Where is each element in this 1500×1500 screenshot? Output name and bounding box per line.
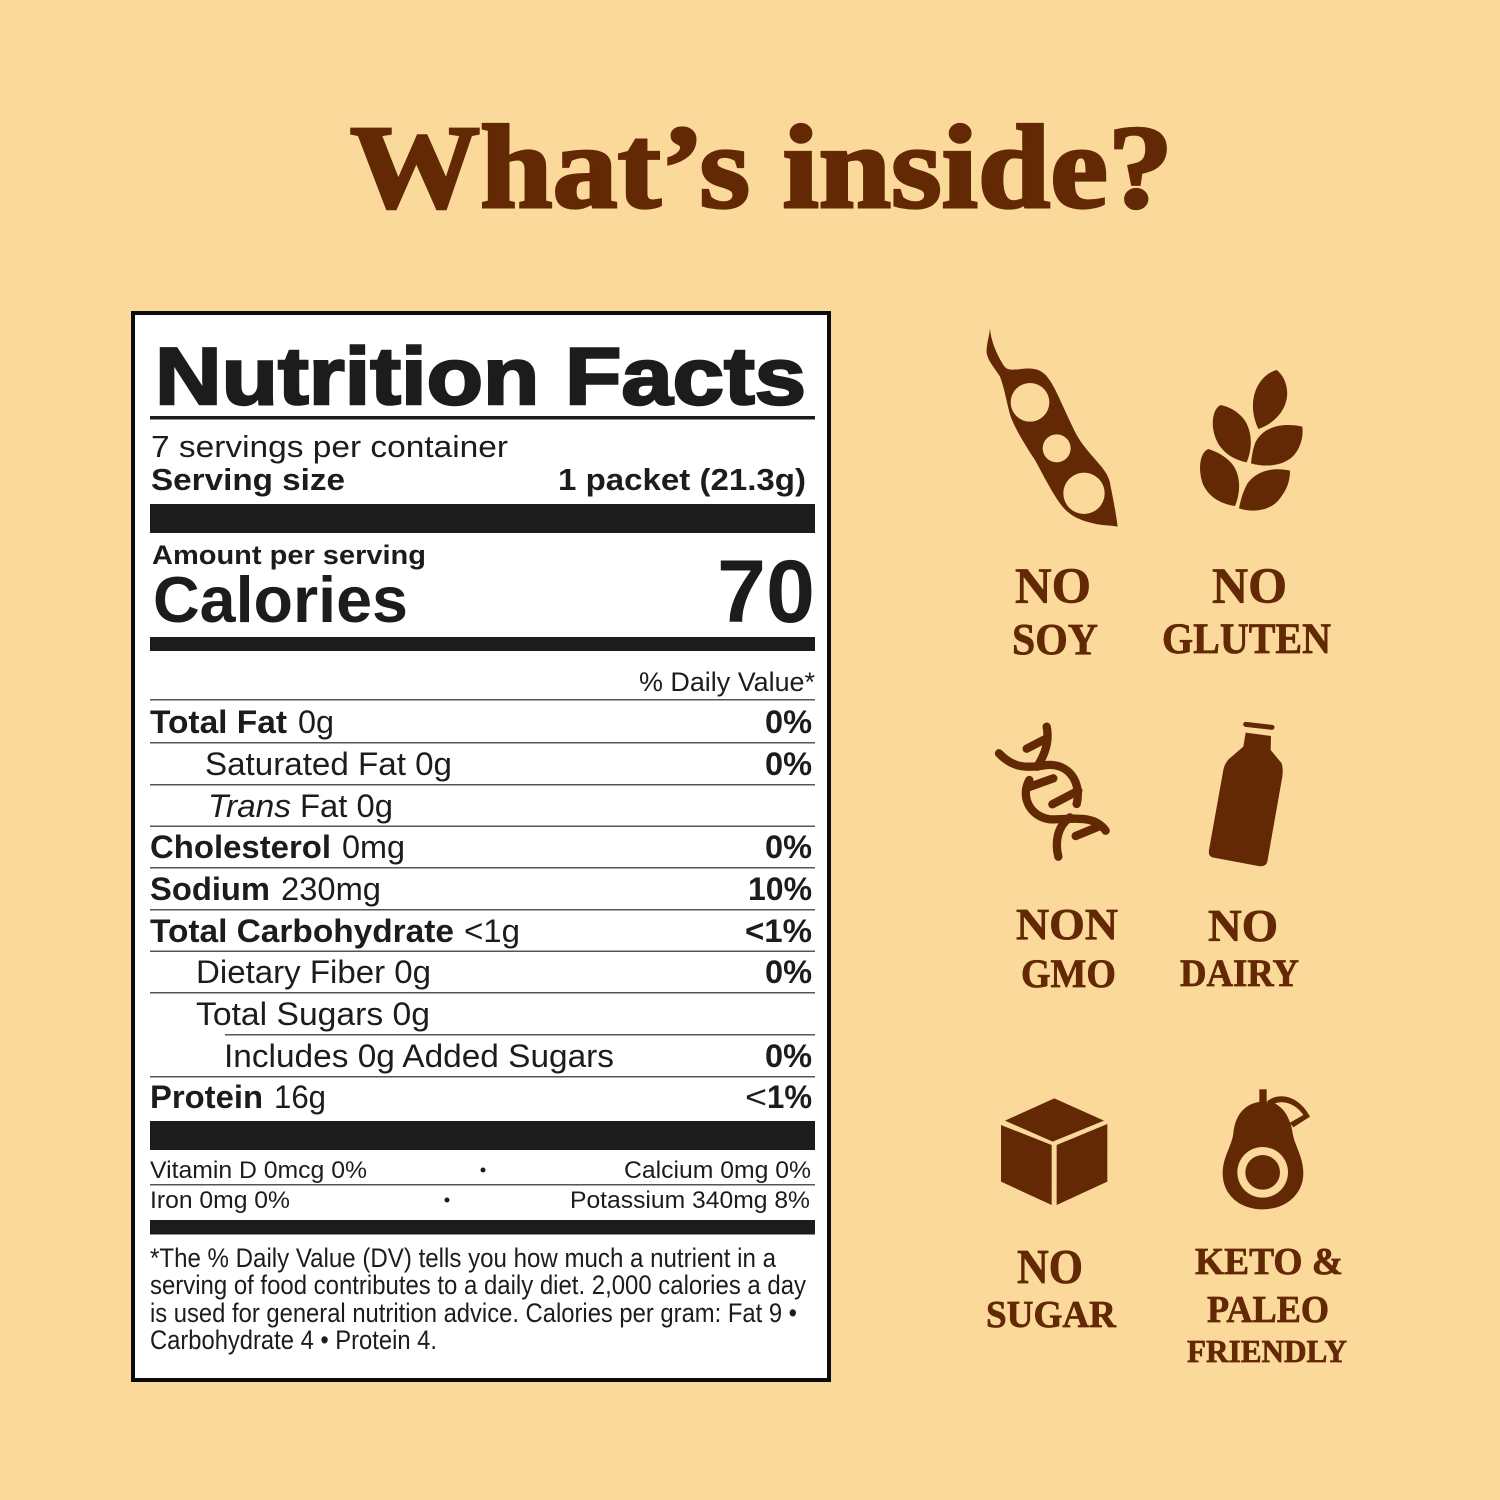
icon: dna [999, 727, 1106, 857]
title: What’s inside? [350, 101, 1173, 233]
row: dietary fiber: Dietary Fiber 0g [196, 954, 431, 990]
row: trans fat: Trans [208, 788, 291, 824]
icon: avocado [1223, 1089, 1310, 1209]
icon: soy pod [987, 328, 1118, 527]
row: cholesterol [150, 829, 812, 865]
label: keto and paleo friendly: FRIENDLY [1187, 1333, 1347, 1369]
row: cholesterol: 0% [765, 829, 812, 865]
label: no gluten: NO [1212, 559, 1287, 615]
row: saturated fat: Saturated Fat 0g [205, 746, 452, 782]
row: total fat: 0% [765, 704, 812, 740]
calories value: 70 [717, 541, 815, 641]
label: keto and paleo friendly: KETO & [1195, 1241, 1343, 1283]
serving size: Serving size [151, 462, 345, 497]
row: trans fat [208, 788, 393, 824]
label: no dairy: DAIRY [1180, 952, 1299, 995]
row: sodium: 10% [748, 871, 812, 907]
footnote [150, 1243, 806, 1355]
row: vitamin d and calcium: Calcium 0mg 0% [624, 1157, 811, 1184]
footnote: *The % Daily Value (DV) tells you how much a nutrient in a [150, 1243, 777, 1273]
row: sodium: 230mg [281, 871, 381, 907]
label: no sugar: SUGAR [986, 1294, 1117, 1336]
row: iron and potassium [150, 1187, 810, 1214]
servings per container: 7 servings per container [151, 429, 508, 464]
row: sodium [150, 871, 812, 907]
amount per serving: Amount per serving [152, 540, 426, 570]
label: no sugar: NO [1017, 1239, 1083, 1294]
row: added sugars: Includes 0g Added Sugars [224, 1038, 614, 1074]
row: total fat [150, 704, 812, 740]
label: no soy: NO [1015, 559, 1091, 615]
row: cholesterol: Cholesterol [150, 829, 331, 865]
row: added sugars: 0% [765, 1038, 812, 1074]
icon: sugar cube [1001, 1098, 1107, 1205]
panel: nutrition facts [133, 313, 829, 1380]
footnote: serving of food contributes to a daily diet. 2,000 calories a day [150, 1270, 806, 1300]
row: added sugars [224, 1038, 812, 1074]
row: total carbohydrate: Total Carbohydrate [150, 913, 454, 949]
label: no dairy: NO [1208, 901, 1278, 951]
row: vitamin d and calcium [150, 1157, 811, 1184]
row: cholesterol: 0mg [342, 829, 405, 865]
daily value header: % Daily Value* [639, 667, 815, 697]
row: total fat: Total Fat [150, 704, 287, 740]
row: saturated fat [205, 746, 812, 782]
row: protein: 16g [274, 1079, 326, 1115]
row: vitamin d and calcium: Vitamin D 0mcg 0% [150, 1157, 367, 1184]
label: non gmo: GMO [1021, 951, 1116, 996]
label: no soy [1012, 559, 1098, 664]
label: no dairy [1180, 901, 1299, 995]
row: protein: < [745, 1079, 767, 1115]
row: protein: 1% [767, 1079, 812, 1115]
footnote: is used for general nutrition advice. Calories per gram: Fat 9 • [150, 1298, 797, 1328]
row: iron and potassium: Potassium 340mg 8% [570, 1187, 810, 1214]
row: sodium: Sodium [150, 871, 270, 907]
row: total carbohydrate: <1% [745, 913, 812, 949]
row: total sugars: Total Sugars 0g [196, 996, 430, 1032]
row: total fat: 0g [298, 704, 334, 740]
row: protein [150, 1079, 812, 1115]
calories label: Calories [153, 563, 408, 636]
label: keto and paleo friendly: PALEO [1207, 1289, 1329, 1331]
heading: nutrition facts: Nutrition Facts [155, 332, 806, 422]
row: total carbohydrate [150, 913, 812, 949]
row: protein: Protein [150, 1079, 263, 1115]
footnote: Carbohydrate 4 • Protein 4. [150, 1325, 437, 1355]
label: non gmo: NON [1016, 900, 1118, 949]
label: no gluten [1162, 559, 1331, 663]
icon: wheat [1200, 370, 1303, 511]
row: dietary fiber [196, 954, 812, 990]
label: non gmo [1016, 900, 1118, 996]
label: no sugar [986, 1239, 1117, 1336]
row: total carbohydrate: <1g [464, 913, 520, 949]
serving size [151, 462, 806, 497]
row: dietary fiber: 0% [765, 954, 812, 990]
icon: bottle [1209, 724, 1283, 866]
label: no gluten: GLUTEN [1162, 616, 1331, 663]
row: trans fat: Fat 0g [300, 788, 393, 824]
label: keto and paleo friendly [1187, 1241, 1347, 1369]
row: saturated fat: 0% [765, 746, 812, 782]
serving size: 1 packet (21.3g) [558, 462, 806, 497]
label: no soy: SOY [1012, 615, 1098, 664]
row: iron and potassium: Iron 0mg 0% [150, 1187, 290, 1214]
